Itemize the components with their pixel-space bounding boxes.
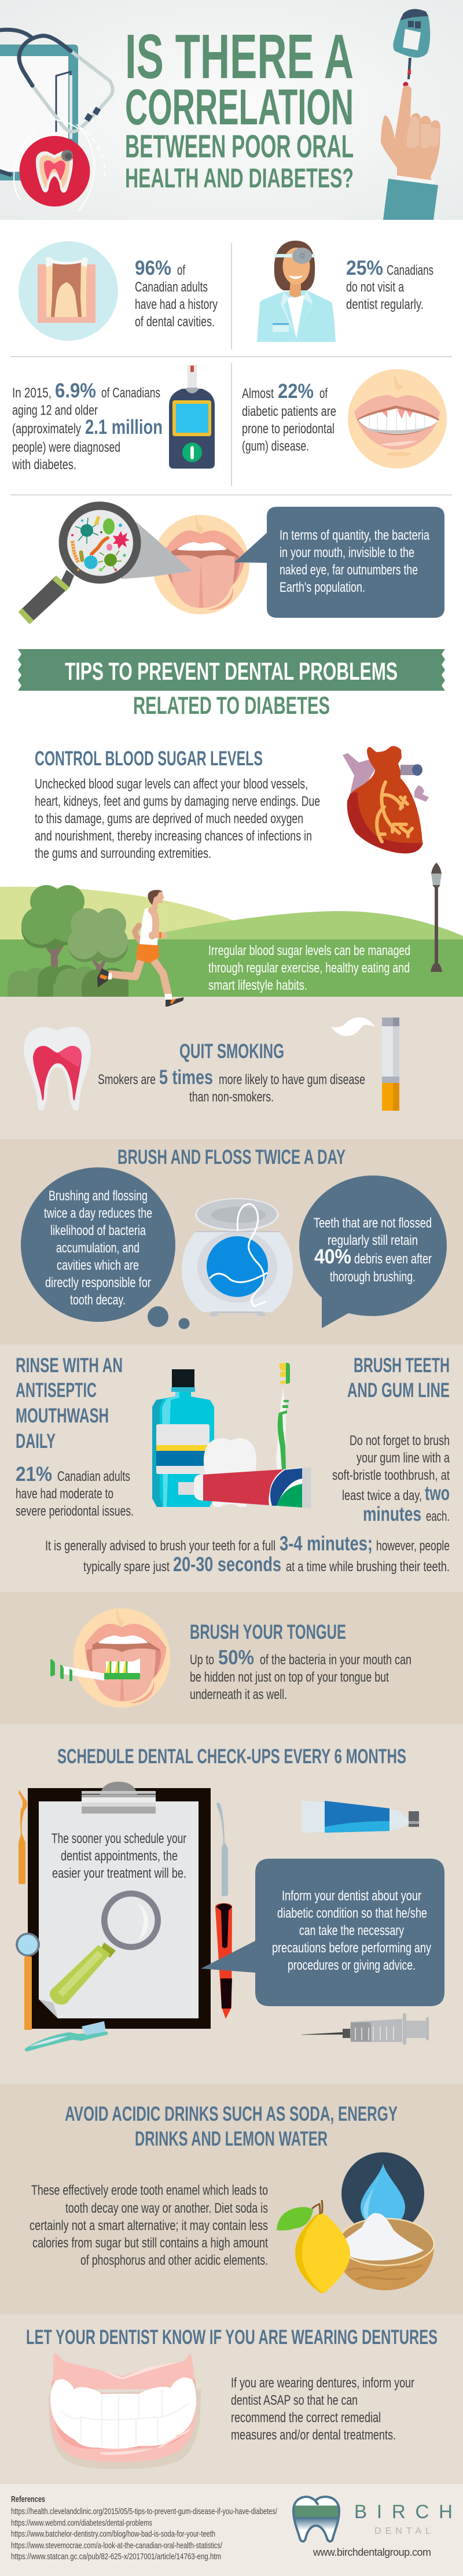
icon: blue toothpaste tube xyxy=(302,1800,419,1833)
text: dentures advice xyxy=(231,2375,414,2443)
text: 21 percent: 21% xyxy=(16,1463,52,1486)
text: tongue advice: of the bacteria in your mouth can xyxy=(260,1652,411,1668)
text: tongue advice: 50% xyxy=(218,1646,254,1669)
text: smokers: than non-smokers. xyxy=(189,1089,274,1105)
icon: trees xyxy=(21,885,128,997)
text: 22 percent periodontal: Almost xyxy=(242,386,274,401)
icon: bushes xyxy=(8,965,128,1000)
callout: left thought bubble xyxy=(21,1167,190,1329)
text: 96 percent cavities xyxy=(135,257,218,330)
icon: inflamed gums smile xyxy=(348,369,447,469)
text: 6.9 percent diagnosed: 2.1 million xyxy=(85,416,163,438)
text: 22 percent periodontal: diabetic patients are xyxy=(242,404,336,419)
icon: glucose meter xyxy=(393,9,430,87)
heading: avoid acidic drinks: DRINKS AND LEMON WATER xyxy=(135,2128,328,2150)
icon: mouthwash bottle xyxy=(152,1369,214,1507)
icon: tooth xyxy=(204,1438,256,1507)
text: 25 percent canadians: Canadians xyxy=(387,263,433,278)
text: acidic drinks advice: calories from sugar but still contains a high amount xyxy=(32,2235,268,2251)
callout: bacteria: in your mouth, invisible to the xyxy=(280,545,414,561)
text: dentures advice: measures and/or dental treatments. xyxy=(231,2427,396,2443)
icon: toothpaste xyxy=(178,1468,311,1508)
text: references xyxy=(11,2494,278,2562)
icon: runner xyxy=(97,890,172,1000)
text: 6.9 percent diagnosed: (approximately xyxy=(12,421,82,437)
panel: dentures xyxy=(0,2315,463,2484)
text: blood sugar body: the gums and surrounding extremities. xyxy=(35,846,211,861)
panel: landscape with runner xyxy=(0,863,463,1000)
panel: statistics xyxy=(10,241,452,624)
icon: red pen xyxy=(215,1903,232,2019)
callout: left thought bubble: Brushing and flossing xyxy=(49,1188,148,1204)
logo: birch dental xyxy=(293,2497,453,2558)
text: brushing time xyxy=(45,1532,450,1576)
text: 21 percent: Canadian adults xyxy=(57,1469,130,1484)
panel: brush and floss xyxy=(0,1139,463,1344)
text: blood sugar body: and nourishment, thereby increasing chances of infections in xyxy=(35,828,312,844)
text: 22 percent periodontal: 22% xyxy=(278,380,314,403)
heading: rinse with mouthwash: ANTISEPTIC xyxy=(16,1379,97,1402)
text: tongue advice: Up to xyxy=(190,1652,214,1668)
callout: left thought bubble: likelihood of bacteria xyxy=(50,1223,146,1239)
icon: dental probe xyxy=(216,1803,228,1896)
text: brushing time: 20-30 seconds xyxy=(173,1553,281,1576)
text: gum line advice: minutes xyxy=(363,1503,421,1525)
text: smokers: 5 times xyxy=(159,1066,213,1089)
text: 6.9 percent diagnosed: 6.9% xyxy=(55,379,96,402)
heading: brush teeth and gum line xyxy=(347,1354,450,1402)
text: 22 percent periodontal: of xyxy=(319,386,328,401)
heading: rinse with mouthwash xyxy=(16,1354,123,1453)
text: references: https://www.webmd.com/diabetes/dental-problems xyxy=(11,2519,152,2528)
text: 21 percent: have had moderate to xyxy=(16,1486,113,1502)
text: references: https://www.statcan.gc.ca/pub/82-625-x/2017001/article/14763-eng.htm xyxy=(11,2552,221,2562)
icon: toothbrush xyxy=(276,1363,290,1469)
text: 21 percent: severe periodontal issues. xyxy=(16,1503,134,1519)
text: tongue advice: underneath it as well. xyxy=(190,1687,287,1702)
callout: right speech bubble xyxy=(299,1175,447,1328)
text: references: https://health.clevelandclinic.org/2015/05/5-tips-to-prevent-gum-disease-if-you-have-diabetes/ xyxy=(11,2507,278,2516)
callout: right speech bubble: regularly still retain xyxy=(328,1233,418,1248)
text: tongue advice xyxy=(190,1646,411,1702)
text: 96 percent cavities: have had a history xyxy=(135,297,218,312)
callout: left thought bubble: directly responsible for xyxy=(45,1275,151,1291)
icon: mouth with tongue xyxy=(152,515,249,614)
icon: tooth cross-section xyxy=(19,241,118,341)
text: clipboard note xyxy=(52,1831,186,1881)
panel: schedule check-ups xyxy=(0,1724,463,2084)
text: 6.9 percent diagnosed: In 2015, xyxy=(12,385,52,401)
banner: tips heading xyxy=(18,649,445,691)
callout: left thought bubble: accumulation, and xyxy=(56,1240,139,1256)
text: dentures advice: recommend the correct remedial xyxy=(231,2410,381,2426)
panel: header xyxy=(0,0,463,220)
text: blood sugar body xyxy=(35,776,320,861)
text: references: References xyxy=(11,2494,45,2504)
panel: quit smoking xyxy=(0,996,463,1139)
heading: control blood sugar levels: CONTROL BLOOD SUGAR LEVELS xyxy=(35,747,263,770)
icon: cigarette xyxy=(382,1018,399,1111)
icon: syringe xyxy=(302,2013,429,2045)
text: acidic drinks advice: These effectively erode tooth enamel which leads to xyxy=(31,2183,268,2198)
heading: rinse with mouthwash: MOUTHWASH xyxy=(16,1405,109,1427)
icon: runner front shoe xyxy=(165,996,184,1007)
callout: right speech bubble: debris even after xyxy=(354,1251,432,1267)
callout: inform your dentist xyxy=(201,1859,444,2006)
text: brushing time: It is generally advised to brush your teeth for a full xyxy=(45,1538,275,1554)
heading: avoid acidic drinks xyxy=(65,2103,398,2150)
text: smokers xyxy=(98,1066,365,1105)
title xyxy=(125,21,354,194)
callout: inform your dentist: procedures or giving advice. xyxy=(288,1958,416,1973)
icon: dentures xyxy=(49,2353,201,2469)
text: 6.9 percent diagnosed: people) were diagnosed xyxy=(12,440,120,455)
text: references: https://www.stevemocrae.com/a-look-at-the-canadian-oral-health-statistics/ xyxy=(11,2541,223,2551)
icon: mouth with toothbrush xyxy=(50,1608,170,1708)
text: brushing time: 3-4 minutes; xyxy=(280,1532,373,1555)
icon: clipboard xyxy=(0,45,78,180)
text: 21 percent xyxy=(16,1463,134,1519)
text: blood sugar body: Unchecked blood sugar levels can affect your blood vessels, xyxy=(35,776,308,792)
callout: right speech bubble: thorough brushing. xyxy=(330,1269,416,1285)
icon: magnifier on clipboard xyxy=(50,1890,161,2004)
logo: birch dental: BIRCH xyxy=(354,2501,453,2522)
callout: inform your dentist: can take the necessary xyxy=(299,1923,405,1939)
text: irregular blood sugar xyxy=(208,943,410,993)
text: 96 percent cavities: 96% xyxy=(135,257,171,279)
heading: quit smoking: QUIT SMOKING xyxy=(179,1040,284,1063)
callout: bacteria: Earth's population. xyxy=(280,580,365,595)
text: 6.9 percent diagnosed: of Canadians xyxy=(101,385,160,401)
stat dividers xyxy=(10,243,452,495)
icon: teal toothbrush xyxy=(25,2021,108,2051)
text: 25 percent canadians: dentist regularly. xyxy=(346,297,424,312)
icon: smoke xyxy=(331,1018,375,1036)
heading: brush your tongue: BRUSH YOUR TONGUE xyxy=(190,1621,346,1643)
text: clipboard note: dentist appointments, the xyxy=(61,1848,178,1864)
icon: blood glucose meter xyxy=(169,365,215,469)
text: gum line advice: each. xyxy=(426,1509,450,1524)
text: 96 percent cavities: of xyxy=(177,263,185,278)
text: 6.9 percent diagnosed xyxy=(12,379,163,473)
callout: bacteria xyxy=(234,507,444,618)
text: blood sugar body: to this damage, gums are deprived of much needed oxygen xyxy=(35,811,303,827)
text: tongue advice: be hidden not just on top of your tongue but xyxy=(190,1670,389,1685)
callout: left thought bubble: tooth decay. xyxy=(70,1292,126,1308)
icon: magnifying glass with bacteria xyxy=(19,502,249,624)
text: 25 percent canadians: 25% xyxy=(346,257,383,279)
text: smokers: more likely to have gum disease xyxy=(219,1072,365,1088)
text: acidic drinks advice: certainly not a smart alternative; it may contain less xyxy=(30,2218,268,2234)
text: references: https://www.batchelor-dentistry.com/blog/how-bad-is-soda-for-your-teeth xyxy=(11,2530,215,2539)
icon: street lamp xyxy=(431,863,442,972)
text: 25 percent canadians: do not visit a xyxy=(346,279,404,295)
text: gum line advice: two xyxy=(425,1482,450,1505)
icon: dental mirror xyxy=(16,1933,40,2030)
icon: heart xyxy=(343,746,429,853)
text: acidic drinks advice: tooth decay one way or another. Diet soda is xyxy=(65,2201,268,2216)
title: HEALTH AND DIABETES? xyxy=(125,163,354,194)
callout: left thought bubble: twice a day reduces the xyxy=(44,1206,152,1221)
icon: stethoscope xyxy=(0,30,113,175)
text: acidic drinks advice xyxy=(30,2183,268,2268)
text: dentures advice: dentist ASAP so that he can xyxy=(231,2393,358,2408)
heading: rinse with mouthwash: RINSE WITH AN xyxy=(16,1354,123,1377)
text: gum line advice: least twice a day, xyxy=(342,1488,422,1503)
icon: tooth with cavity on red circle xyxy=(14,120,105,211)
panel: rinse and brush xyxy=(0,1344,463,1592)
text: gum line advice xyxy=(332,1433,450,1525)
text: smokers: Smokers are xyxy=(98,1072,156,1088)
panel: footer xyxy=(0,2484,463,2576)
text: 6.9 percent diagnosed: with diabetes. xyxy=(12,457,76,473)
callout: right speech bubble: 40% xyxy=(314,1245,351,1268)
callout: left thought bubble: cavities which are xyxy=(57,1258,139,1273)
text: 96 percent cavities: Canadian adults xyxy=(135,279,208,295)
text: 6.9 percent diagnosed: aging 12 and older xyxy=(12,403,98,418)
logo: birch dental: www.birchdentalgroup.com xyxy=(313,2546,431,2558)
text: blood sugar body: heart, kidneys, feet and gums by damaging nerve endings. Due xyxy=(35,794,320,809)
text: brushing time: typically spare just xyxy=(83,1559,170,1575)
panel: control blood sugar xyxy=(35,746,429,861)
panel: avoid acidic drinks xyxy=(0,2084,463,2315)
panel: brush your tongue xyxy=(0,1592,463,1724)
icon: dentist xyxy=(257,241,336,342)
hills xyxy=(0,887,463,997)
heading: brush and floss: BRUSH AND FLOSS TWICE A DAY xyxy=(117,1146,346,1169)
heading: related to diabetes: RELATED TO DIABETES xyxy=(133,692,330,720)
icon: pointing hand xyxy=(381,86,440,220)
text: 25 percent canadians xyxy=(346,257,433,312)
text: clipboard note: The sooner you schedule your xyxy=(52,1831,186,1847)
text: 22 percent periodontal: (gum) disease. xyxy=(242,438,309,454)
icon: tooth xyxy=(24,1027,91,1111)
text: irregular blood sugar: smart lifestyle habits. xyxy=(208,978,307,993)
icon: water drop xyxy=(341,2152,424,2235)
heading: rinse with mouthwash: DAILY xyxy=(16,1430,56,1453)
text: 96 percent cavities: of dental cavities. xyxy=(135,314,215,330)
icon: lemon xyxy=(277,2200,350,2293)
icon: orange dental tool xyxy=(19,1790,27,1884)
text: 22 percent periodontal xyxy=(242,380,336,454)
text: acidic drinks advice: of phosphorus and other acidic elements. xyxy=(80,2253,268,2268)
logo: birch dental: DENTAL xyxy=(374,2526,431,2536)
icon: dental floss xyxy=(182,1198,293,1316)
icon: bowl of baking soda xyxy=(337,2213,434,2290)
icon: clipboard xyxy=(28,1782,211,2029)
text: 22 percent periodontal: prone to periodontal xyxy=(242,421,335,437)
text: clipboard note: easier your treatment will be. xyxy=(52,1866,186,1881)
